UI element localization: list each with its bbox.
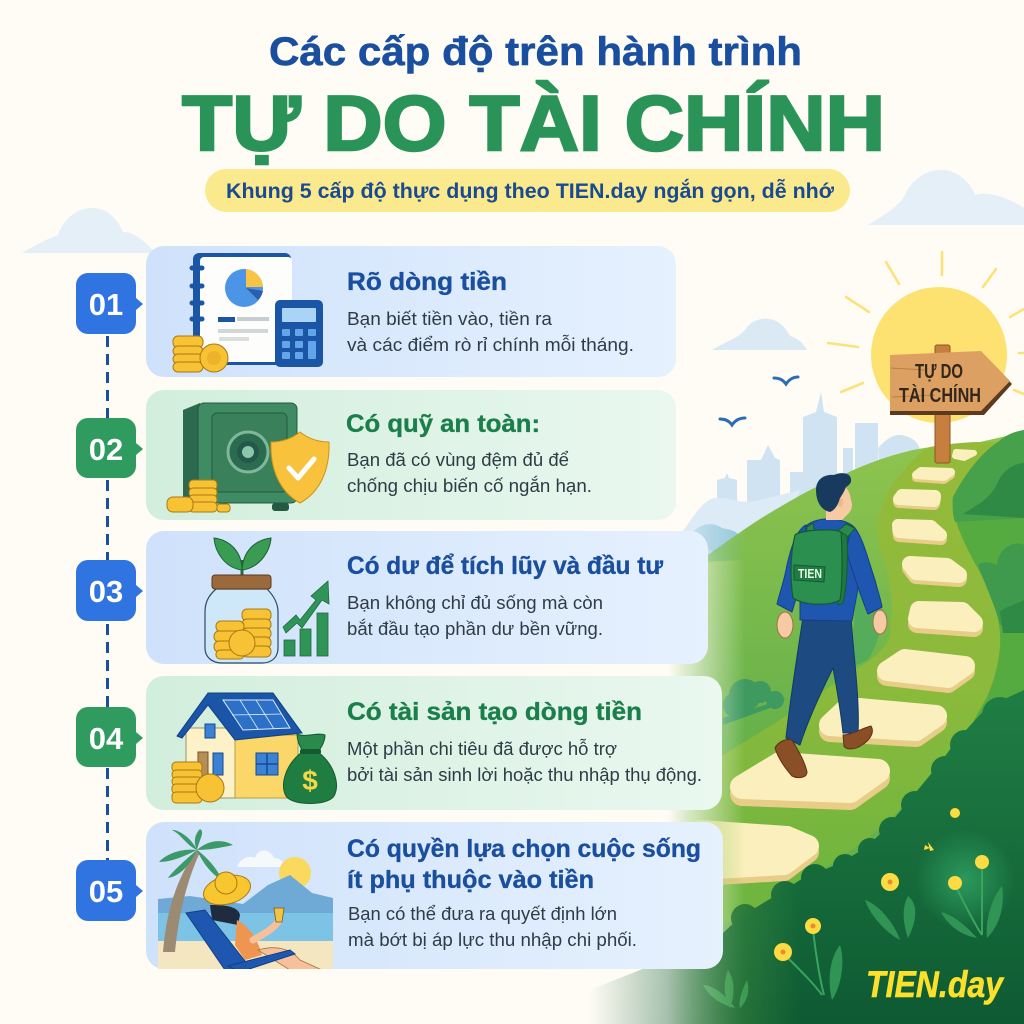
description: mà bớt bị áp lực thu nhập chi phối. bbox=[348, 930, 637, 950]
title line 1: Các cấp độ trên hành trình bbox=[269, 30, 802, 74]
subtitle pill bbox=[205, 169, 850, 212]
hill bbox=[672, 436, 1006, 1024]
icon: safe, shield and coins bbox=[167, 403, 329, 512]
right upper dark bush bbox=[963, 463, 1024, 518]
cloud: top left bbox=[22, 208, 155, 253]
description bbox=[347, 593, 603, 639]
lower left bush bbox=[723, 679, 787, 725]
description bbox=[348, 904, 637, 950]
badge 01: 01 bbox=[89, 287, 123, 322]
illustration: birds bbox=[720, 377, 798, 425]
hands bbox=[777, 612, 793, 638]
subtitle pill: Khung 5 cấp độ thực dụng theo TIEN.day ngắn gọn, dễ nhớ bbox=[226, 178, 835, 203]
icon: house with solar panel, coins and money bag bbox=[172, 693, 336, 804]
illustration: wooden signpost bbox=[890, 345, 1012, 463]
illustration: stepping stones bbox=[700, 452, 974, 875]
badge 03: 03 bbox=[89, 574, 123, 609]
heading: Có quyền lựa chọn cuộc sống bbox=[347, 835, 701, 863]
description: bắt đầu tạo phần dư bền vững. bbox=[347, 618, 603, 639]
illustration: small cloud bbox=[712, 319, 807, 350]
description: Bạn biết tiền vào, tiền ra bbox=[347, 309, 553, 329]
heading: Rõ dòng tiền bbox=[347, 268, 507, 296]
description bbox=[347, 309, 634, 355]
badge 02 bbox=[76, 418, 143, 478]
panel: level 2 bbox=[76, 390, 676, 520]
logo: TIEN.day: TIEN.day bbox=[866, 964, 1005, 1005]
description: Bạn có thể đưa ra quyết định lớn bbox=[348, 904, 617, 924]
right middle dark bush bbox=[1000, 600, 1024, 633]
description: chống chịu biến cố ngắn hạn. bbox=[347, 475, 592, 496]
heading bbox=[347, 835, 701, 894]
pants bbox=[786, 617, 858, 745]
illustration: wooden signpost: TỰ DO bbox=[915, 361, 963, 383]
leaves bbox=[703, 886, 1003, 1008]
description bbox=[347, 450, 592, 496]
cloud: top right bbox=[868, 170, 1024, 225]
winding path bbox=[690, 442, 1000, 940]
badge 04 bbox=[76, 707, 143, 767]
right upper bush bbox=[953, 430, 1024, 522]
panel: level 1 bbox=[76, 246, 676, 377]
illustration: sun with rays bbox=[828, 252, 1024, 423]
illustration: bottom foreground bushes bbox=[590, 690, 1024, 1024]
timeline dashed connector bbox=[106, 336, 109, 860]
badge 05: 05 bbox=[89, 874, 123, 909]
illustration: man walking with backpack bbox=[775, 473, 887, 778]
heading: Có quỹ an toàn: bbox=[346, 410, 540, 438]
hair bbox=[816, 473, 851, 512]
shoes bbox=[775, 739, 807, 778]
title line 2: TỰ DO TÀI CHÍNH bbox=[182, 79, 885, 167]
right middle bush bbox=[978, 544, 1024, 625]
icon: coin jar with plant and growth chart bbox=[205, 538, 329, 663]
panel: level 5 bbox=[76, 822, 723, 972]
panel: level 4 bbox=[76, 676, 722, 810]
badge 01 bbox=[76, 273, 143, 334]
badge 04: 04 bbox=[89, 721, 124, 756]
illustration: man walking with backpack: TIEN bbox=[798, 567, 822, 581]
heading: Có dư để tích lũy và đầu tư bbox=[347, 552, 664, 580]
description: và các điểm rò rỉ chính mỗi tháng. bbox=[347, 334, 634, 355]
description: bởi tài sản sinh lời hoặc thu nhập thụ động. bbox=[347, 765, 702, 785]
shaded lawn near hand bbox=[850, 574, 882, 668]
jacket bbox=[800, 519, 864, 621]
face and neck bbox=[826, 484, 852, 520]
right lawn bbox=[953, 430, 1024, 722]
icon: house with solar panel, coins and money bag: $ bbox=[302, 765, 318, 796]
icon: relaxing on a beach bbox=[158, 829, 333, 972]
badge 05 bbox=[76, 860, 143, 921]
heading: ít phụ thuộc vào tiền bbox=[347, 866, 594, 894]
illustration: landscape hill and path bbox=[640, 430, 1024, 1024]
backpack bbox=[806, 523, 855, 543]
badge 03 bbox=[76, 560, 143, 621]
description: Bạn đã có vùng đệm đủ để bbox=[347, 450, 569, 470]
description bbox=[347, 738, 702, 785]
icon: notebook, calculator and coins bbox=[173, 253, 323, 372]
heading: Có tài sản tạo dòng tiền bbox=[347, 698, 642, 726]
badge 02: 02 bbox=[89, 432, 123, 467]
description: Một phần chi tiêu đã được hỗ trợ bbox=[347, 738, 617, 759]
illustration: city skyline bbox=[680, 392, 920, 555]
description: Bạn không chỉ đủ sống mà còn bbox=[347, 593, 603, 613]
illustration: flowers bbox=[774, 808, 989, 961]
panel: level 3 bbox=[76, 531, 708, 664]
illustration: wooden signpost: TÀI CHÍNH bbox=[899, 384, 981, 407]
illustration: teal bush behind hill bbox=[694, 524, 738, 562]
